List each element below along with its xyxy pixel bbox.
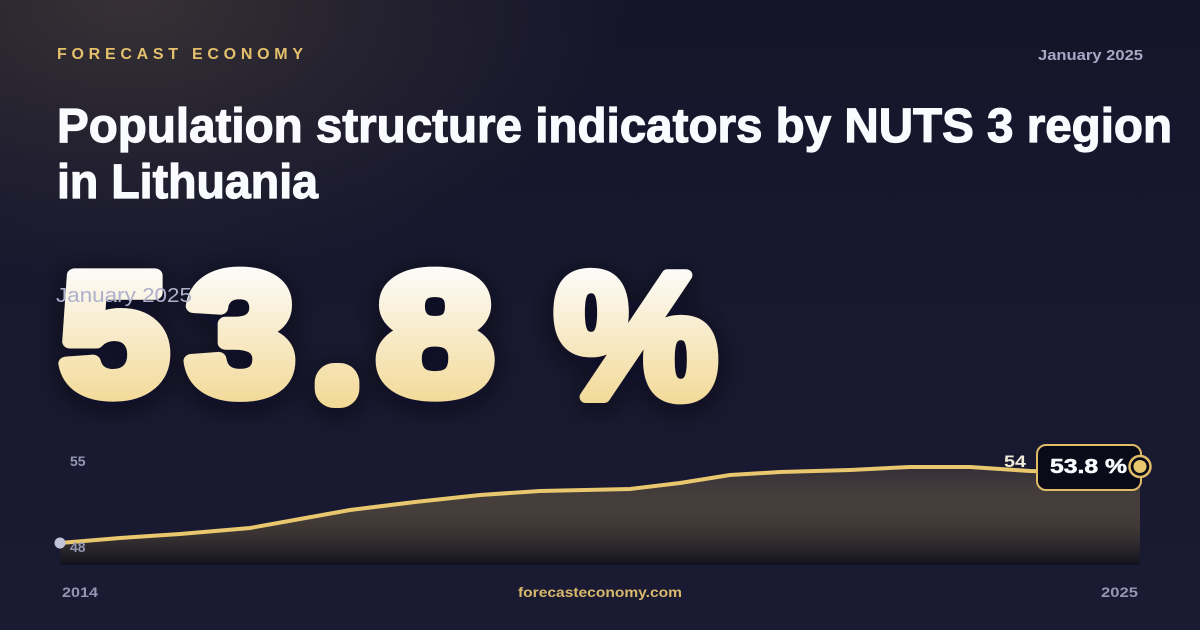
axis label 54: 54	[1004, 452, 1027, 471]
value badge	[1037, 445, 1141, 490]
big value: %	[555, 237, 717, 435]
x axis end year: 2025	[1101, 584, 1138, 600]
source url: forecasteconomy.com	[518, 584, 682, 600]
value badge: 53.8 %	[1050, 456, 1127, 478]
big value: 8	[378, 239, 493, 430]
chart line	[60, 467, 1140, 543]
big value: .	[332, 354, 343, 398]
title	[57, 100, 1172, 209]
big value	[60, 237, 717, 435]
date top right: January 2025	[1038, 47, 1143, 64]
axis label 55: 55	[70, 453, 86, 469]
title: Population structure indicators by NUTS 3 region	[57, 100, 1172, 153]
big value: 53	[60, 238, 294, 430]
axis label 48: 48	[70, 539, 86, 555]
overlapping date label: January 2025	[56, 285, 192, 307]
start point	[54, 538, 66, 548]
line chart	[54, 466, 1140, 565]
brand label: FORECAST ECONOMY	[57, 46, 303, 63]
x axis start year: 2014	[62, 584, 98, 600]
title: in Lithuania	[57, 156, 318, 209]
chart area fill	[60, 466, 1140, 565]
end point marker	[1130, 456, 1150, 477]
